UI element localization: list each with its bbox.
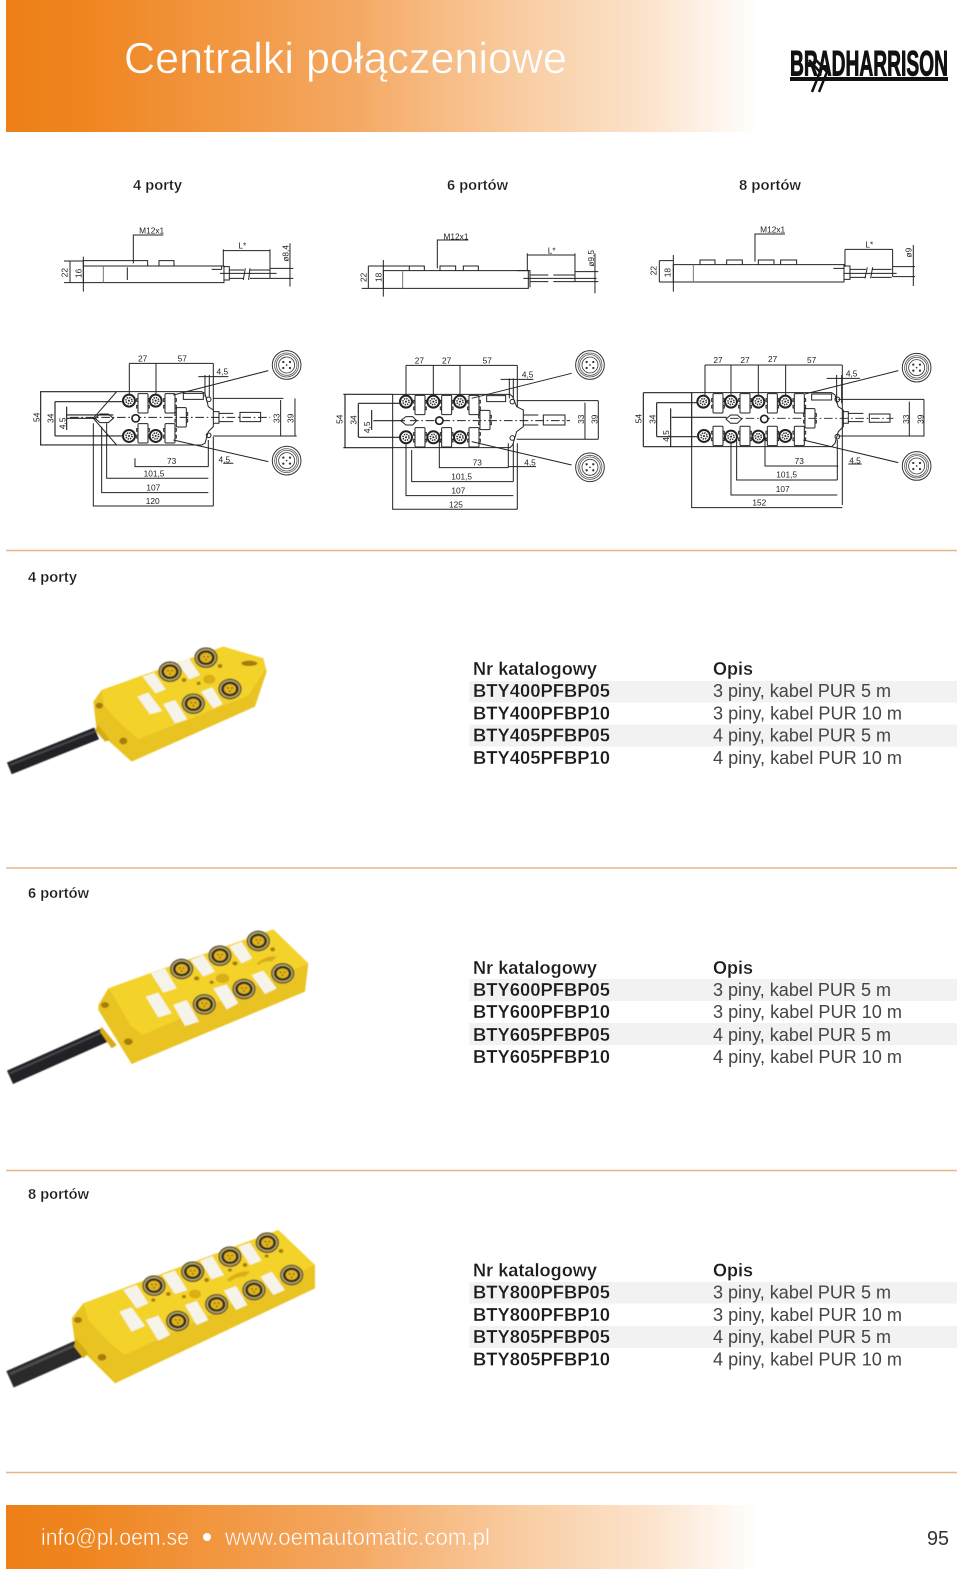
side view: M12x1 [443,231,469,241]
header row: Opis [713,957,753,978]
header row [473,1260,753,1280]
footer website: www.oemautomatic.com.pl [224,1524,490,1550]
side view: ø8,4 [280,245,290,262]
data rows: 4 piny, kabel PUR 5 m [713,1326,891,1347]
header row: Opis [713,1260,753,1280]
data rows: BTY405PFBP10 [473,747,610,768]
side view: L* [238,240,247,250]
top view: 57 [807,355,817,365]
data rows: BTY405PFBP05 [473,724,610,746]
header band [6,0,760,132]
top view: 101,5 [144,469,165,479]
footer band [6,1505,760,1569]
top view [633,353,931,508]
label: 8 portów drawing: 8 portów [739,178,802,194]
top view [31,351,301,506]
header row [473,658,753,679]
top view: 101,5 [776,470,797,480]
data rows: BTY400PFBP10 [473,702,610,724]
technical drawing: 8 ports [633,225,931,508]
data rows: 3 piny, kabel PUR 10 m [713,1001,902,1022]
divider [6,550,957,552]
label: 6 portów drawing: 6 portów [447,178,509,194]
divider [6,1170,957,1172]
top view: 27 [442,356,452,366]
top view: 73 [473,458,482,468]
divider [6,867,957,869]
product photo: 8-port box [10,1230,315,1383]
top view: 107 [451,486,466,496]
data rows: BTY805PFBP05 [473,1326,610,1347]
top view: 39 [589,414,599,424]
data rows: BTY800PFBP10 [473,1304,610,1325]
side view: 22 [59,268,69,277]
top view: 107 [776,484,790,494]
data rows: 3 piny, kabel PUR 10 m [713,702,902,724]
side view: L* [865,239,874,249]
top view: 34 [647,414,657,424]
product photo: 6-port box [10,929,308,1077]
top view: 27 [740,355,750,365]
top view: 107 [146,483,161,493]
data rows: 4 piny, kabel PUR 10 m [713,1348,902,1370]
technical drawing: 4 ports [31,225,301,506]
top view: 4,5 [217,366,228,376]
side view: M12x1 [139,225,165,235]
side view: ø9 [904,247,914,258]
top view: 125 [449,499,463,509]
technical drawing: 6 ports [334,231,604,509]
top view: 27 [138,354,148,364]
divider [6,1472,957,1474]
side view: 22 [359,272,369,282]
side view [649,225,915,292]
data rows: 3 piny, kabel PUR 5 m [713,979,891,1000]
footer email: info@pl.oem.se [41,1524,189,1550]
top view: 54 [334,414,344,424]
top view: 73 [795,456,804,466]
footer bullet [203,1533,211,1541]
top view: 54 [633,414,643,423]
top view: 101,5 [451,472,472,482]
data rows: BTY400PFBP05 [473,680,610,701]
data rows: 4 piny, kabel PUR 10 m [713,1046,902,1067]
top view: 57 [178,354,187,364]
top view: 54 [31,412,41,422]
table: 6 ports [470,957,957,1067]
top view: 4,5 [219,454,230,464]
top view: 33 [901,414,911,424]
side view: 18 [373,272,383,282]
data rows: 4 piny, kabel PUR 10 m [713,747,902,768]
top view: 4,5 [849,455,861,465]
data rows: BTY600PFBP10 [473,1001,610,1022]
section heading: 4 porty: 4 porty [28,570,77,586]
product photo: 4-port box [9,647,267,768]
top view: 4,5 [846,369,858,379]
header row [473,957,753,978]
side view: ø9,5 [586,250,596,267]
side view [359,231,598,297]
top view: 27 [713,355,723,365]
top view [334,351,604,509]
side view: 22 [649,266,659,275]
data rows [473,979,902,1067]
data rows: BTY805PFBP10 [473,1348,610,1370]
table: 8 ports [470,1260,957,1370]
data rows: 3 piny, kabel PUR 5 m [713,680,891,701]
top view: 34 [349,415,359,425]
top view: 152 [752,498,767,508]
row bands [470,681,957,746]
data rows [473,680,902,768]
top view: 57 [483,356,492,366]
title: Centralki połączeniowe [124,34,567,83]
data rows: 3 piny, kabel PUR 5 m [713,1282,891,1302]
data rows: 3 piny, kabel PUR 10 m [713,1304,902,1325]
top view: 33 [576,414,586,424]
page number: 95 [927,1528,949,1550]
top view: 4,5 [524,458,536,468]
top view: 4,5 [522,369,534,379]
section heading: 8 portów: 8 portów [28,1187,90,1203]
header row: Nr katalogowy [473,957,598,978]
side view: 18 [663,268,673,277]
top view: 39 [285,413,295,423]
header row: Nr katalogowy [473,1260,598,1280]
top view: 4,5 [362,421,372,433]
top view: 27 [768,354,778,364]
side view: M12x1 [760,225,786,235]
top view: 27 [415,356,424,366]
top view: 120 [146,496,160,506]
row bands [470,1282,957,1348]
header row: Opis [713,658,753,679]
side view [59,225,293,292]
data rows: BTY605PFBP10 [473,1046,610,1067]
label: 4 porty drawing: 4 porty [133,178,182,194]
row bands [470,979,957,1045]
side view: 16 [73,268,83,278]
side view: L* [548,245,556,255]
data rows: BTY600PFBP05 [473,979,610,1000]
section heading: 6 portów: 6 portów [28,886,90,902]
data rows: BTY605PFBP05 [473,1024,610,1045]
data rows: 4 piny, kabel PUR 5 m [713,724,891,746]
top view: 73 [167,456,177,466]
top view: 4,5 [58,417,68,429]
top view: 4,5 [661,430,671,442]
data rows: BTY800PFBP05 [473,1282,610,1302]
header row: Nr katalogowy [473,658,598,679]
table: 4 ports [470,658,957,768]
data rows [473,1282,902,1370]
data rows: 4 piny, kabel PUR 5 m [713,1024,891,1045]
top view: 33 [271,413,281,423]
top view: 34 [45,413,55,423]
top view: 39 [915,414,925,424]
